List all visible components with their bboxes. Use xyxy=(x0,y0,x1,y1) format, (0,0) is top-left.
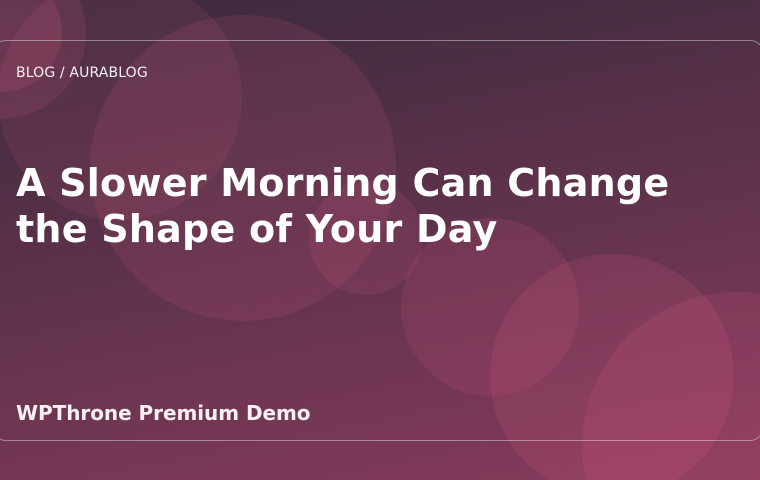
title: the Shape of Your Day xyxy=(16,207,498,251)
eyebrow label: BLOG / AURABLOG xyxy=(16,65,148,81)
footer label: WPThrone Premium Demo xyxy=(16,401,310,425)
title xyxy=(16,161,669,251)
title: A Slower Morning Can Change xyxy=(16,161,669,205)
